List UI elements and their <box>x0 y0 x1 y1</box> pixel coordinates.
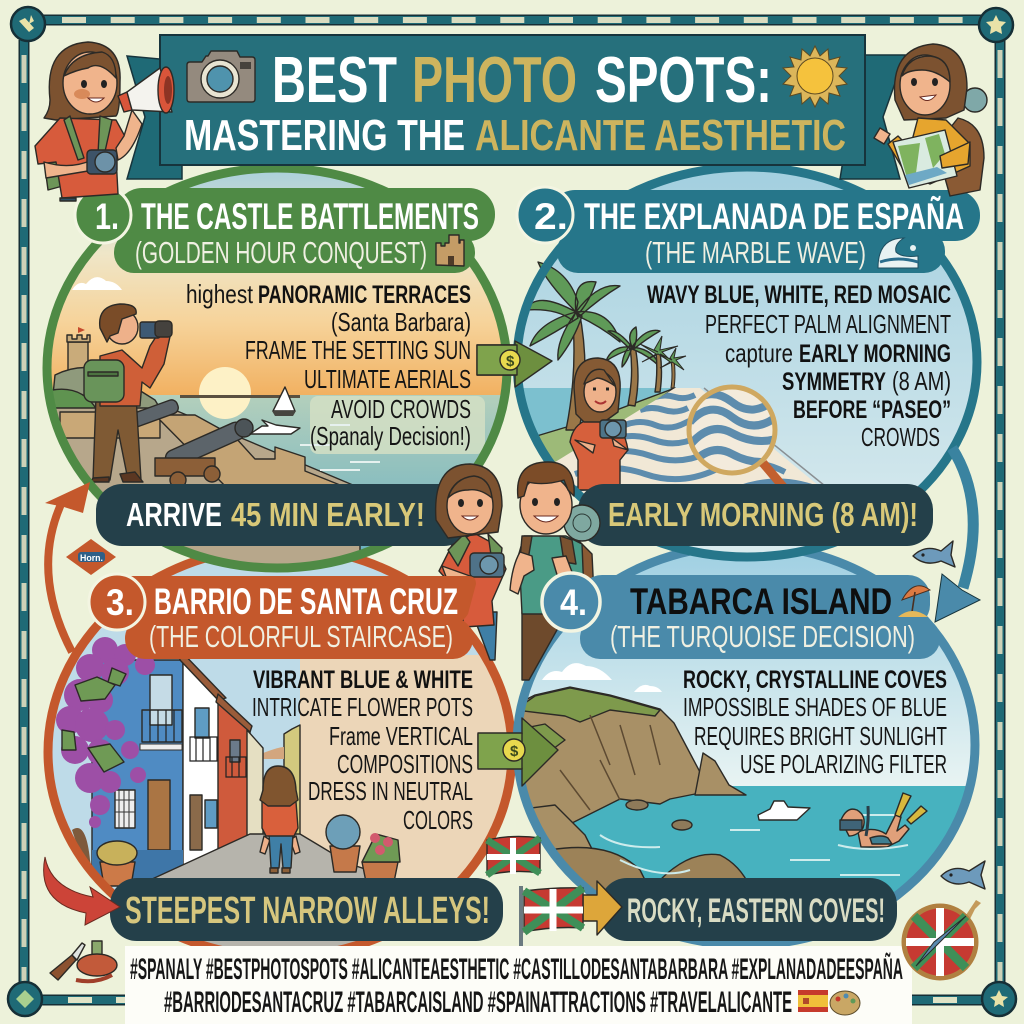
text block: capture <box>725 338 793 368</box>
heading pill <box>542 573 940 659</box>
title line two <box>184 111 846 160</box>
heading pill <box>75 187 495 273</box>
icon: metro sign <box>66 539 116 575</box>
arrow: money arrow three to four <box>478 718 558 786</box>
icon: compass <box>904 900 981 978</box>
character: woman with camera on promenade <box>570 358 628 490</box>
heading pill <box>89 574 476 659</box>
subheading text: (GOLDEN HOUR CONQUEST) <box>135 235 427 270</box>
title line one <box>272 43 772 116</box>
character: snorkeler <box>838 793 927 849</box>
number badge: 2. <box>534 196 568 237</box>
callout: early morning: EARLY MORNING (8 AM)! <box>608 496 918 533</box>
number badge: 3. <box>106 582 134 623</box>
number badge: 1. <box>95 196 119 237</box>
arrow: gold arrow to rocky coves <box>583 881 622 935</box>
scene: palm promenade <box>515 165 980 565</box>
title line two: MASTERING THE <box>184 111 465 160</box>
illustration: left flower pot <box>97 841 137 886</box>
arrow: curved blue arrow two to four <box>935 448 980 622</box>
text block: EARLY MORNING <box>799 340 951 368</box>
hashtag footer <box>125 946 912 1024</box>
text block <box>186 279 471 451</box>
icon: camera <box>187 51 255 102</box>
panel 3 artwork: colourful street <box>45 545 515 957</box>
arrow: curved orange arrow three to one <box>45 482 90 652</box>
text block <box>647 281 951 452</box>
illustration: flower pots <box>326 815 400 882</box>
heading text: THE CASTLE BATTLEMENTS <box>141 196 479 237</box>
circle outline <box>47 168 507 568</box>
character: photographer with green backpack <box>84 304 172 482</box>
scene: castle terrace at sunset <box>45 165 510 578</box>
arrow: money arrow one to two: $ <box>506 353 515 370</box>
icon: fish upper <box>913 541 955 567</box>
callout: arrive early: 45 MIN EARLY! <box>231 496 425 533</box>
panel 4 heading and text <box>542 573 947 941</box>
character: man with backpack, centre <box>510 462 600 680</box>
text block: INTRICATE FLOWER POTS <box>252 692 473 722</box>
icon: spanish flag <box>798 990 828 1012</box>
text block: DRESS IN NEUTRAL <box>308 776 473 806</box>
text block: highest <box>186 279 254 309</box>
circle outline <box>517 545 975 945</box>
text block: COMPOSITIONS <box>337 749 473 779</box>
arrow: red curved arrow to callout <box>44 857 120 925</box>
heading text: BARRIO DE SANTA CRUZ <box>154 581 458 622</box>
text block: Frame VERTICAL <box>329 721 473 751</box>
text block: PANORAMIC TERRACES <box>258 281 471 309</box>
panel 1: the castle battlements <box>45 165 510 578</box>
icon: palette <box>830 991 860 1015</box>
callout: steepest alleys <box>110 878 503 941</box>
flag: large basque flag <box>521 886 583 946</box>
icon: beach umbrella <box>898 586 930 617</box>
character: woman with map <box>874 44 987 196</box>
character: girl with megaphone <box>35 42 174 201</box>
callout: arrive early: ARRIVE <box>126 496 222 533</box>
icon: megaphone <box>118 67 174 113</box>
text block: (Santa Barbara) <box>331 307 471 337</box>
title line two: ALICANTE AESTHETIC <box>475 111 846 160</box>
icon: wave <box>878 238 918 268</box>
text block <box>252 666 473 835</box>
text block: VIBRANT BLUE & WHITE <box>253 666 473 694</box>
icon: sun <box>783 46 847 107</box>
heading pill <box>517 187 980 273</box>
illustration: palm trees <box>526 262 686 430</box>
icon: craft tools <box>50 941 117 981</box>
icon: castle <box>436 235 464 266</box>
title line one: BEST <box>272 43 397 116</box>
text block: CROWDS <box>861 422 940 452</box>
heading text: TABARCA ISLAND <box>630 581 892 622</box>
text block: AVOID CROWDS <box>331 394 471 424</box>
callout: rocky coves <box>600 878 897 941</box>
icon: metro sign: Horn. <box>80 553 103 563</box>
character: woman walking <box>260 766 300 873</box>
text block: COLORS <box>403 805 473 835</box>
text block: ULTIMATE AERIALS <box>304 364 471 394</box>
arrow: money arrow three to four: $ <box>510 743 519 760</box>
text block: SYMMETRY <box>782 368 886 396</box>
number badge <box>517 187 573 243</box>
flag: small basque flag <box>487 836 540 875</box>
text block: (Spanaly Decision!) <box>310 421 471 451</box>
panel 2: the explanada de espana <box>515 165 980 565</box>
number badge: 4. <box>560 582 587 623</box>
title line one: SPOTS: <box>595 43 772 116</box>
character: woman with camera, centre <box>436 464 506 660</box>
number badge <box>542 573 600 631</box>
text block: (8 AM) <box>892 366 951 396</box>
text block <box>683 666 947 779</box>
panel 4 artwork: island cove <box>515 545 980 951</box>
arrow: money arrow one to two <box>477 341 552 387</box>
number badge <box>75 187 131 243</box>
illustration: bougainvillea tree <box>56 637 155 828</box>
subheading text: (THE COLORFUL STAIRCASE) <box>149 619 453 654</box>
text block: BEFORE “PASEO” <box>793 396 951 424</box>
callout: steepest alleys: STEEPEST NARROW ALLEYS! <box>125 890 490 932</box>
callout: early morning <box>578 484 933 546</box>
circle outline <box>517 167 977 557</box>
text block: FRAME THE SETTING SUN <box>245 335 471 365</box>
title line one: PHOTO <box>412 43 577 116</box>
title banner <box>127 35 905 179</box>
number badge <box>89 574 145 630</box>
circle outline <box>48 547 512 957</box>
subheading text: (THE MARBLE WAVE) <box>645 235 866 270</box>
icon: fish lower <box>941 861 985 889</box>
callout: arrive early <box>96 484 470 546</box>
panel 3 heading and text <box>89 574 503 941</box>
illustration: magnifier with wave mosaic <box>688 386 785 489</box>
